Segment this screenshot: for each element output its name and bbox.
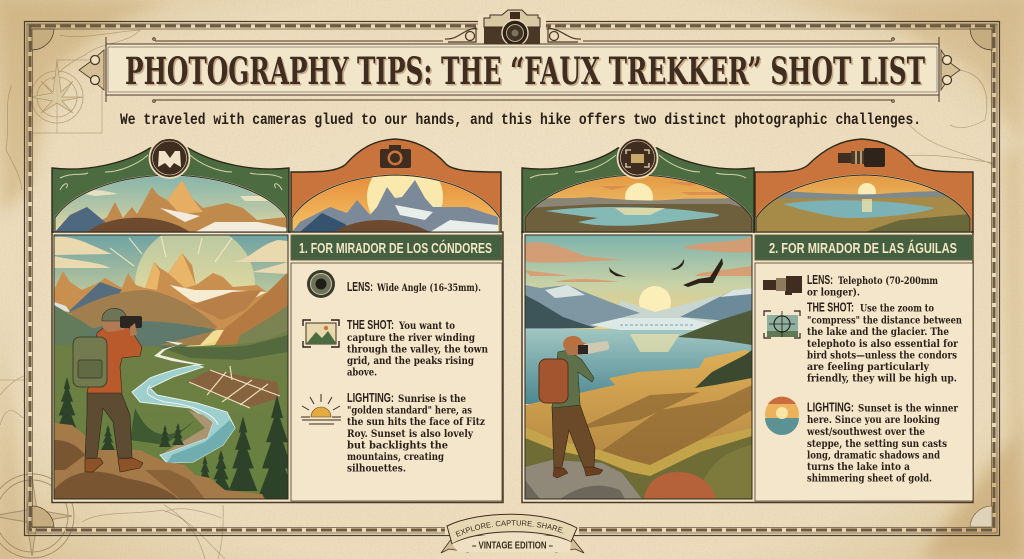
icon: framed photo medallion xyxy=(618,138,658,178)
tip text: the shot xyxy=(807,300,962,384)
compass rose: upper left xyxy=(31,61,83,123)
arch: orange steppe scene xyxy=(755,139,973,232)
title banner xyxy=(79,37,960,102)
icon: framed landscape xyxy=(303,320,339,347)
tip text: lens xyxy=(347,279,481,294)
tip text: the shot: through the valley, the town xyxy=(347,344,488,356)
icon: lens xyxy=(307,270,335,298)
figure: hiker with camera xyxy=(73,308,143,472)
map decoration: lower-middle globe lines xyxy=(0,376,223,559)
tip text: lighting: here. Since you are looking xyxy=(807,414,940,426)
tip text: the shot: THE SHOT: xyxy=(807,300,854,314)
section heading band xyxy=(291,235,502,260)
icon: sunset over water xyxy=(765,397,799,435)
icon: sunrise xyxy=(301,394,341,424)
tip text: lens: or longer). xyxy=(807,286,860,298)
tip text: lens: Telephoto (70-200mm xyxy=(838,275,938,287)
tip text: the shot: telephoto is also essential for xyxy=(807,338,959,350)
tip text: lighting: the sun hits the face of Fitz xyxy=(347,416,485,428)
ribbon: explore, capture, share xyxy=(440,514,584,554)
birds: condors in the sky xyxy=(609,258,723,287)
compass rose: lower left xyxy=(0,474,74,558)
tip text: the shot: bird shots—unless the condors xyxy=(807,350,957,362)
tip text: the shot: "compress" the distance between xyxy=(807,314,962,326)
tip text: lighting: shimmering sheet of gold. xyxy=(807,472,932,484)
tip text: lens: Wide Angle (16-35mm). xyxy=(376,282,481,294)
illustration: hiker photographing glacier lake xyxy=(525,235,752,499)
icon: telephoto lens xyxy=(838,148,885,167)
icon: wide lens medallion xyxy=(150,138,190,178)
tip text: the shot: are feeling particularly xyxy=(807,361,930,373)
tip text: lighting: mountains, creating xyxy=(347,451,444,463)
tip text: lighting: Sunrise is the xyxy=(398,393,466,405)
tip text: lighting: Sunset is the winner xyxy=(858,402,959,414)
section heading band: 1. FOR MIRADOR DE LOS CÓNDORES xyxy=(299,239,492,257)
icon: vintage camera at top centre xyxy=(478,10,546,50)
tip text: lens: LENS: xyxy=(347,279,373,294)
tip text: lens: LENS: xyxy=(807,272,833,287)
tip text: the shot: You want to xyxy=(398,320,455,332)
tip text: the shot: capture the river winding xyxy=(347,332,475,344)
tip text: lighting: turns the lake into a xyxy=(807,461,910,473)
panel: Mirador de los Cóndores xyxy=(52,138,503,502)
tip text: the shot: grid, and the peaks rising xyxy=(347,355,474,367)
tip text: lens xyxy=(807,272,938,298)
tip text: lighting: Roy. Sunset is also lovely xyxy=(347,428,474,440)
tip text: lighting xyxy=(347,390,485,474)
figure: hiker with telephoto xyxy=(539,336,609,478)
tip text: lighting: "golden standard" here, as xyxy=(347,404,472,416)
town grid xyxy=(187,366,280,408)
tip text: lighting: LIGHTING: xyxy=(807,400,854,414)
tip text: lighting xyxy=(806,400,959,484)
arch: green mountain scene xyxy=(52,148,289,232)
tip text: the shot: above. xyxy=(347,366,377,378)
tips panel xyxy=(755,263,973,501)
tip text: lighting: LIGHTING: xyxy=(347,390,394,405)
tip text: the shot xyxy=(347,317,488,378)
illustration: hiker photographing river valley xyxy=(54,225,297,500)
icon: camera xyxy=(380,145,411,168)
tip text: lighting: steppe, the setting sun casts xyxy=(807,438,947,450)
icon: telephoto lens xyxy=(763,276,802,295)
tip text: the shot: the lake and the glacier. The xyxy=(807,326,949,338)
top flourish lines xyxy=(153,28,894,102)
section heading band xyxy=(755,235,973,260)
tip text: the shot: THE SHOT: xyxy=(347,317,394,332)
tip text: lighting: but backlights the xyxy=(347,440,448,452)
tip text: lighting: long, dramatic shadows and xyxy=(807,450,940,462)
tips panel xyxy=(291,263,502,501)
arch: orange sunrise scene xyxy=(291,139,501,235)
section heading band: 2. FOR MIRADOR DE LAS ÁGUILAS xyxy=(769,240,957,257)
tip text: the shot: friendly, they will be high up. xyxy=(807,372,957,384)
icon: target reticle xyxy=(764,311,800,338)
tip text: the shot: Use the zoom to xyxy=(860,302,934,314)
ribbon: explore, capture, share: EXPLORE. CAPTURE. SHARE. xyxy=(456,520,564,537)
tip text: lighting: west/southwest over the xyxy=(806,426,925,438)
tip text: lighting: silhouettes. xyxy=(347,462,406,474)
arch: green lake scene xyxy=(522,148,754,232)
panel: Mirador de las Águilas xyxy=(522,138,973,502)
rock outcrop xyxy=(54,423,265,499)
ribbon: explore, capture, share: – VINTAGE EDITION – xyxy=(472,540,553,552)
